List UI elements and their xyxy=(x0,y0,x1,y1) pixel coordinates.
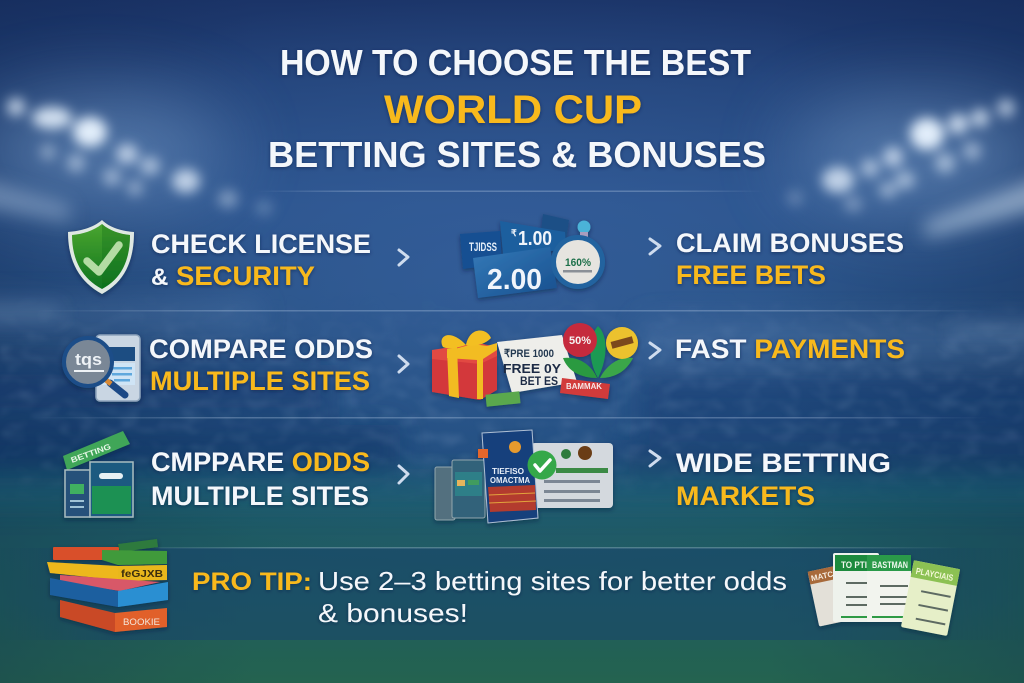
text: wide betting markets: WIDE BETTING xyxy=(676,448,891,478)
panel: pro tip band xyxy=(0,548,1024,640)
icon: magnifier and phone xyxy=(64,335,140,401)
title: HOW TO CHOOSE THE BEST xyxy=(280,42,751,83)
text: claim bonuses free bets: CLAIM BONUSES xyxy=(676,228,904,258)
icon: odds tickets and stopwatch: 1.00 xyxy=(518,228,552,250)
arrow: row 1 left xyxy=(399,250,408,265)
text: fast payments: FAST PAYMENTS xyxy=(675,334,905,364)
icon: betting phone and comparison card: TIEFISO xyxy=(492,467,524,476)
icon: odds tickets and stopwatch: ₹ xyxy=(511,228,517,238)
icon: gift and free bet ticket: BET ES xyxy=(520,374,558,388)
icon: magnifier and phone: tqs xyxy=(75,350,102,369)
icon: banknote and betting apps xyxy=(63,431,133,517)
arrow: row 1 right xyxy=(650,239,660,254)
arrow: row 2 right xyxy=(650,343,660,358)
text: wide betting markets xyxy=(676,448,891,511)
icon: banknote and betting apps: BETTING xyxy=(70,442,112,465)
text: cmppare odds multiple sites: MULTIPLE SITES xyxy=(151,481,369,511)
title: WORLD CUP xyxy=(384,88,642,132)
icon: gift and free bet ticket: FREE 0Y xyxy=(503,361,561,376)
text: compare odds multiple sites xyxy=(149,334,373,396)
icon: stack of bookie books: feGJXB xyxy=(121,569,163,580)
icon: stack of bookie books xyxy=(47,539,168,632)
text: pro tip: PRO TIP: xyxy=(192,568,312,596)
title: BETTING SITES & BONUSES xyxy=(268,134,766,175)
icon: odds tickets and stopwatch: TJIDSS xyxy=(469,240,497,254)
text: check license and security: & xyxy=(151,264,168,291)
icon: gift and free bet ticket: BAMMAK xyxy=(566,382,602,391)
icon: gift and free bet ticket xyxy=(432,323,638,407)
icon: market cards xyxy=(808,553,960,636)
arrow: row 3 right xyxy=(650,451,660,466)
icon: odds tickets and stopwatch xyxy=(460,214,605,298)
text: pro tip: & bonuses! xyxy=(318,598,468,628)
icon: gift and free bet ticket: ₹PRE 1000 xyxy=(504,348,554,360)
icon: odds tickets and stopwatch: 160% xyxy=(565,257,591,269)
icon: market cards: MATC xyxy=(810,570,834,583)
icon: market cards: PLAYCIAIS xyxy=(915,566,954,583)
icon: market cards: TO PTI xyxy=(841,560,867,570)
text: cmppare odds multiple sites: CMPPARE ODDS xyxy=(151,447,370,477)
icon: betting phone and comparison card xyxy=(435,430,613,523)
text: pro tip: Use 2–3 betting sites for better odds xyxy=(318,566,787,596)
icon: gift and free bet ticket: 50% xyxy=(569,335,591,347)
arrow: row 3 left xyxy=(399,466,408,483)
left floodlights xyxy=(0,95,230,205)
title xyxy=(268,42,766,175)
arrow: row 2 left xyxy=(399,356,408,372)
text: check license and security xyxy=(151,229,371,291)
text: wide betting markets: MARKETS xyxy=(676,481,815,511)
icon: market cards: BASTMAN xyxy=(872,560,908,570)
icon: odds tickets and stopwatch: 2.00 xyxy=(487,264,542,296)
text: compare odds multiple sites: MULTIPLE SITES xyxy=(150,366,370,396)
icon: betting phone and comparison card: OMACTMA xyxy=(490,476,530,485)
stadium roof streaks xyxy=(0,172,1024,337)
text: claim bonuses free bets: FREE BETS xyxy=(676,260,826,290)
text: check license and security: SECURITY xyxy=(176,261,315,291)
text: check license and security: CHECK LICENSE xyxy=(151,229,371,259)
right floodlights xyxy=(790,100,1024,210)
text: compare odds multiple sites: COMPARE ODDS xyxy=(149,334,373,364)
text: claim bonuses free bets xyxy=(676,228,904,290)
text: cmppare odds multiple sites xyxy=(151,447,370,511)
icon: security shield xyxy=(68,220,134,294)
icon: stack of bookie books: BOOKIE xyxy=(123,617,160,628)
text: pro tip xyxy=(192,566,787,628)
